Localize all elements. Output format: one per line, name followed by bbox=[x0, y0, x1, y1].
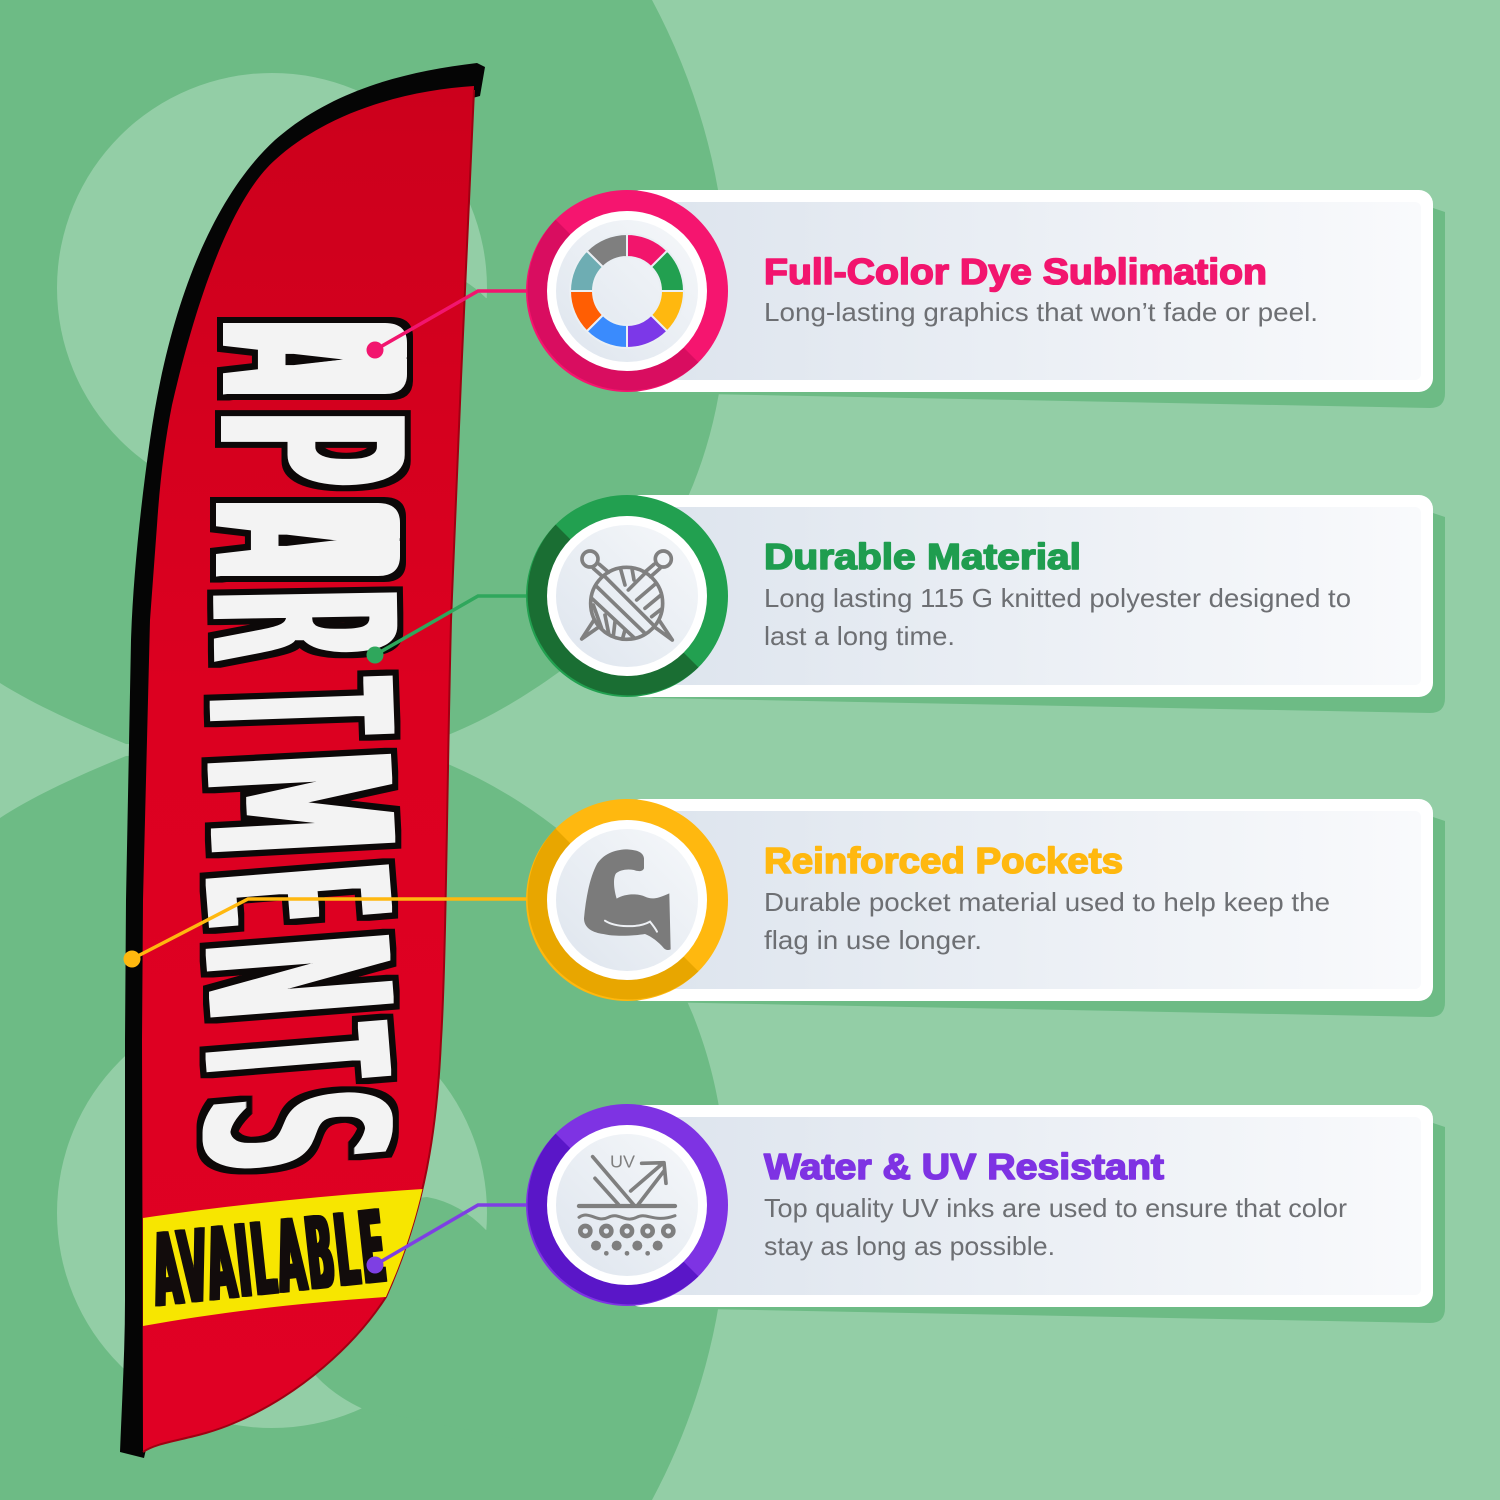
lower circle notch bbox=[250, 1197, 520, 1440]
connector: green bbox=[366, 596, 530, 664]
upper light circle bbox=[57, 73, 487, 503]
card shadow bbox=[650, 513, 1445, 713]
connector: yellow bbox=[124, 899, 530, 968]
card body bbox=[627, 495, 1433, 697]
word: APARTMENTS: T bbox=[143, 676, 451, 740]
badge: UV bbox=[526, 1104, 728, 1306]
word: APARTMENTS: P bbox=[154, 410, 460, 487]
icon: yarn ball and needles bbox=[582, 551, 672, 642]
card inner panel bbox=[627, 1117, 1421, 1295]
connector: pink bbox=[366, 291, 530, 358]
icon: UV resistant layers: UV bbox=[610, 1152, 635, 1172]
description: Durable pocket material used to help keep the bbox=[764, 887, 1330, 917]
description line two: stay as long as possible. bbox=[764, 1231, 1055, 1261]
description: Long-lasting graphics that won’t fade or peel. bbox=[764, 297, 1318, 327]
flag fabric bbox=[142, 86, 474, 1452]
word: APARTMENTS: R bbox=[146, 586, 454, 663]
card inner panel bbox=[627, 507, 1421, 685]
upper circle notch bbox=[250, 280, 500, 520]
card: Full-Color Dye Sublimation bbox=[627, 190, 1445, 408]
heading: Reinforced Pockets bbox=[764, 840, 1123, 881]
word: APARTMENTS: A bbox=[149, 506, 454, 575]
word: APARTMENTS: A bbox=[156, 326, 462, 393]
description: Long lasting 115 G knitted polyester designed to bbox=[764, 583, 1351, 613]
badge: color wheel bbox=[526, 190, 728, 392]
description line two: flag in use longer. bbox=[764, 925, 982, 955]
heading: Durable Material bbox=[764, 536, 1081, 577]
heading: Water & UV Resistant bbox=[764, 1146, 1164, 1187]
description line two: last a long time. bbox=[764, 621, 955, 651]
description: Top quality UV inks are used to ensure that color bbox=[764, 1193, 1347, 1223]
card: Water & UV Resistant bbox=[627, 1105, 1445, 1323]
card inner panel bbox=[627, 811, 1421, 989]
icon: color wheel bbox=[570, 234, 684, 348]
flag pole sleeve bbox=[120, 63, 485, 1458]
card body bbox=[627, 799, 1433, 1001]
heading: Full-Color Dye Sublimation bbox=[764, 251, 1267, 292]
badge: muscle bbox=[526, 799, 728, 1001]
word: APARTMENTS bbox=[136, 326, 462, 1183]
card shadow bbox=[650, 1123, 1445, 1323]
icon: UV resistant layers bbox=[579, 1152, 675, 1256]
lower light circle bbox=[57, 998, 487, 1428]
connector: purple bbox=[366, 1205, 530, 1274]
card body bbox=[627, 1105, 1433, 1307]
word: AVAILABLE: AVAILABLE bbox=[147, 1189, 393, 1330]
card shadow bbox=[650, 208, 1445, 408]
icon: flexed arm bbox=[584, 849, 671, 950]
badge: yarn bbox=[526, 495, 728, 697]
feather flag bbox=[120, 63, 485, 1458]
card: Durable Material bbox=[627, 495, 1445, 713]
card shadow bbox=[650, 817, 1445, 1017]
word: APARTMENTS: N bbox=[139, 924, 451, 1029]
yellow band bbox=[143, 1189, 432, 1326]
word: APARTMENTS: E bbox=[138, 855, 447, 937]
word: APARTMENTS: M bbox=[140, 744, 450, 862]
fabric edge bbox=[143, 90, 474, 1452]
word: APARTMENTS: S bbox=[136, 1079, 448, 1183]
lower dark blob bbox=[0, 750, 727, 1500]
card: Reinforced Pockets bbox=[627, 799, 1445, 1017]
word: APARTMENTS: T bbox=[138, 1017, 448, 1094]
card inner panel bbox=[627, 202, 1421, 380]
upper dark blob bbox=[0, 0, 727, 752]
card body bbox=[627, 190, 1433, 392]
